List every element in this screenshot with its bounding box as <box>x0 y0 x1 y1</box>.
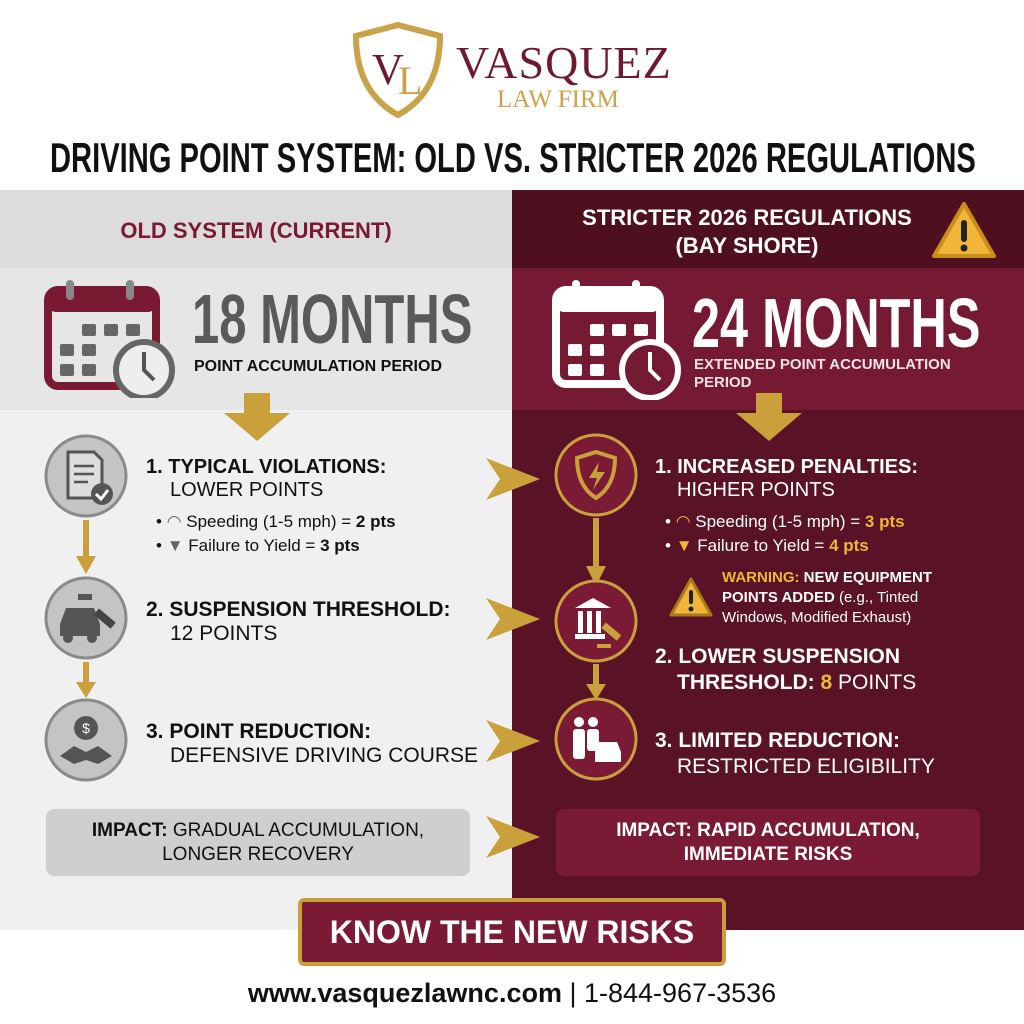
right header: STRICTER 2026 REGULATIONS <box>582 205 912 230</box>
right item 1: 1. INCREASED PENALTIES: <box>655 456 918 478</box>
icon: calendar white <box>552 280 681 400</box>
right item 2: 2. LOWER SUSPENSION <box>655 645 900 668</box>
right item 3: 3. LIMITED REDUCTION: <box>655 729 900 752</box>
warning note: POINTS ADDED (e.g., Tinted <box>722 589 918 606</box>
arrow: left down <box>224 393 290 441</box>
cta button <box>298 898 726 966</box>
right item 1 <box>655 456 918 555</box>
icon: warning small <box>670 577 712 616</box>
impact box: left: LONGER RECOVERY <box>162 844 354 865</box>
left header <box>0 190 512 268</box>
left icon column <box>44 434 128 782</box>
arrow down <box>76 520 96 574</box>
background: left panel <box>0 190 512 930</box>
logo: LAW FIRM <box>497 86 619 113</box>
icon: shield <box>353 22 443 118</box>
icon: document check <box>44 434 128 518</box>
arrow: right down <box>736 393 802 441</box>
left calendar block: POINT ACCUMULATION PERIOD <box>194 358 442 375</box>
left item 1: • ▼ Failure to Yield = 3 pts <box>156 536 360 555</box>
impact box: right <box>556 809 980 876</box>
icon: calendar <box>44 280 175 398</box>
icon: shield bolt <box>554 434 638 516</box>
icon: shield: V <box>372 45 404 94</box>
right header <box>512 190 1024 268</box>
warning note <box>670 569 932 626</box>
impact box: left: IMPACT: GRADUAL ACCUMULATION, <box>92 820 424 841</box>
footer contact: www.vasquezlawnc.com | 1-844-967-3536 <box>248 978 776 1008</box>
impact box: left <box>46 809 470 876</box>
icon: warning <box>932 202 996 258</box>
arrows: left to right <box>486 458 540 858</box>
right item 3 <box>655 729 935 778</box>
icon: money handshake: $ <box>82 720 90 736</box>
left item 3: DEFENSIVE DRIVING COURSE <box>170 744 478 767</box>
left item 2: 12 POINTS <box>170 622 277 645</box>
right item 2 <box>655 645 916 694</box>
left item 2 <box>146 598 451 645</box>
arrow down <box>586 664 606 698</box>
arrow down <box>586 518 606 580</box>
left item 1: • ◠ Speeding (1-5 mph) = 2 pts <box>156 512 396 531</box>
big number: 18 MONTHS <box>192 280 472 358</box>
warning note: WARNING: NEW EQUIPMENT <box>722 569 932 586</box>
left item 1: 1. TYPICAL VIOLATIONS: <box>146 456 386 478</box>
right item 1: • ◠ Speeding (1-5 mph) = 3 pts <box>665 512 905 531</box>
cta button: KNOW THE NEW RISKS <box>330 914 694 950</box>
left item 3: 3. POINT REDUCTION: <box>146 720 371 743</box>
left item 2: 2. SUSPENSION THRESHOLD: <box>146 598 451 621</box>
icon: courthouse gavel <box>554 580 638 662</box>
right icon column <box>554 434 638 780</box>
impact box: right: IMPACT: RAPID ACCUMULATION, <box>616 820 920 841</box>
impact box: right: IMMEDIATE RISKS <box>684 844 852 865</box>
right item 1: HIGHER POINTS <box>677 479 835 501</box>
brand name: VASQUEZ <box>456 37 672 88</box>
right calendar block <box>552 280 980 400</box>
right header: (BAY SHORE) <box>675 233 819 258</box>
arrow down <box>76 662 96 698</box>
icon: people car <box>554 698 638 780</box>
big number: 24 MONTHS <box>692 284 980 362</box>
warning note: Windows, Modified Exhaust) <box>722 609 911 626</box>
left item 1 <box>146 456 396 555</box>
right calendar block: EXTENDED POINT ACCUMULATION <box>694 356 951 373</box>
right item 2: THRESHOLD: 8 POINTS <box>677 671 916 694</box>
logo <box>353 22 672 118</box>
left header: OLD SYSTEM (CURRENT) <box>120 218 392 243</box>
title: DRIVING POINT SYSTEM: OLD VS. STRICTER 2026 REGULATIONS <box>50 134 976 181</box>
background: right panel <box>512 190 1024 930</box>
right item 1: • ▼ Failure to Yield = 4 pts <box>665 536 869 555</box>
left calendar block <box>44 280 472 398</box>
icon: money handshake <box>44 698 128 782</box>
left item 1: LOWER POINTS <box>170 479 323 501</box>
left item 3 <box>146 720 478 767</box>
icon: police car gavel <box>44 576 128 660</box>
right item 3: RESTRICTED ELIGIBILITY <box>677 755 935 778</box>
right calendar block: PERIOD <box>694 374 752 391</box>
icon: shield: L <box>398 58 422 103</box>
